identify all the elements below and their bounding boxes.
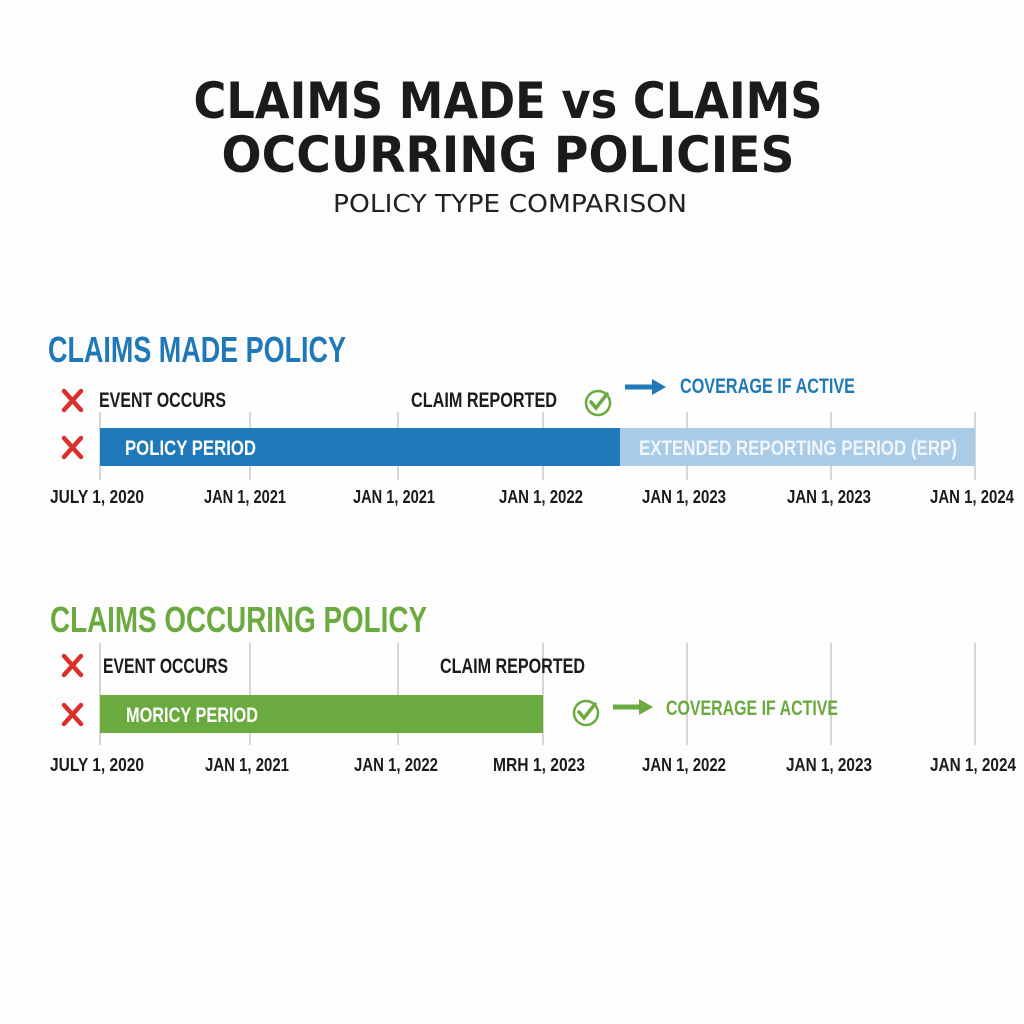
axis dates: JAN 1, 2023 (787, 487, 871, 507)
axis dates: JAN 1, 2021 (353, 487, 435, 507)
axis dates: JAN 1, 2021 (204, 487, 286, 507)
panel: claims made policy: POLICY PERIOD (125, 437, 256, 460)
text: claim reported: CLAIM REPORTED (440, 655, 585, 678)
title: CLAIMS MADE vs CLAIMS (194, 72, 822, 130)
axis dates (50, 487, 1014, 507)
subtitle: POLICY TYPE COMPARISON (333, 189, 687, 218)
panel: claims made policy (48, 329, 1014, 507)
icon: red x bar (64, 438, 81, 457)
bar: ERP (620, 428, 975, 466)
text: coverage: COVERAGE IF ACTIVE (680, 375, 855, 398)
axis dates: JAN 1, 2022 (499, 487, 583, 507)
axis dates: JAN 1, 2021 (205, 755, 289, 775)
axis dates: JAN 1, 2023 (642, 487, 726, 507)
text: event occurs: EVENT OCCURS (99, 389, 226, 412)
bar: policy period (100, 695, 543, 733)
icon: red x event (64, 656, 81, 675)
axis dates: JULY 1, 2020 (50, 487, 144, 507)
arrow (613, 699, 653, 715)
title (194, 72, 822, 184)
icon: red x event (64, 391, 81, 410)
panel: claims occurring policy (50, 599, 1016, 775)
title: OCCURRING POLICIES (222, 126, 794, 184)
axis dates: JAN 1, 2022 (354, 755, 438, 775)
axis dates: JAN 1, 2022 (642, 755, 726, 775)
bar: policy period (100, 428, 620, 466)
icon: check (586, 391, 610, 415)
axis dates: JAN 1, 2023 (786, 755, 872, 775)
axis dates (50, 755, 1016, 775)
axis dates: MRH 1, 2023 (493, 755, 585, 775)
heading: claims occurring: CLAIMS OCCURING POLICY (50, 599, 427, 640)
text: coverage: COVERAGE IF ACTIVE (666, 697, 838, 720)
icon: red x bar (64, 705, 81, 724)
heading: claims made: CLAIMS MADE POLICY (48, 329, 346, 370)
panel: claims occurring policy: MORICY PERIOD (126, 704, 258, 727)
panel: claims made policy: EXTENDED REPORTING PERIOD (ERP) (639, 437, 957, 460)
arrow (625, 379, 666, 395)
icon: check (574, 701, 598, 725)
axis dates: JULY 1, 2020 (50, 755, 144, 775)
text: event occurs: EVENT OCCURS (103, 655, 228, 678)
text: claim reported: CLAIM REPORTED (411, 389, 557, 412)
